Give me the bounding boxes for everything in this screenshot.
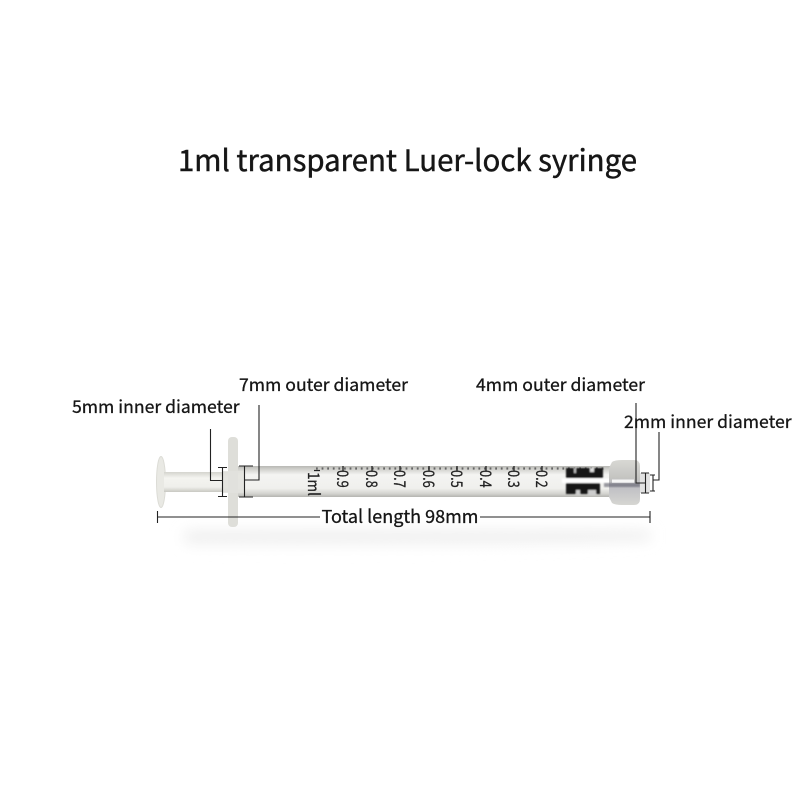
label: 7mm outer diameter: 7mm outer diameter — [239, 372, 408, 397]
graduation labels: 0.4 — [474, 470, 498, 488]
luer tip — [640, 473, 650, 493]
graduation labels: 0.6 — [417, 470, 441, 488]
hub highlight — [612, 480, 634, 483]
label: total length: Total length 98mm — [322, 503, 478, 529]
label: 7mm outer diameter — [239, 372, 408, 497]
graduation labels: 0.3 — [502, 470, 526, 488]
flange collar — [222, 471, 244, 493]
graduation labels: 0.5 — [445, 470, 469, 488]
graduation labels: 1ml — [303, 472, 325, 496]
label: 5mm inner diameter — [72, 394, 240, 496]
graduation ticks — [314, 466, 604, 471]
label: 2mm inner diameter: 2mm inner diameter — [624, 409, 792, 434]
title: 1ml transparent Luer-lock syringe — [178, 138, 637, 180]
ground shadow — [185, 532, 650, 547]
label: 5mm inner diameter: 5mm inner diameter — [72, 394, 240, 419]
flange — [228, 437, 238, 527]
black plunger seal — [562, 468, 612, 495]
label: 4mm outer diameter — [476, 372, 649, 493]
plunger rod — [164, 472, 228, 492]
graduation labels — [303, 470, 554, 496]
label: total length — [158, 503, 650, 529]
graduation labels: 0.9 — [331, 470, 355, 488]
label: 4mm outer diameter: 4mm outer diameter — [476, 372, 645, 397]
graduation labels: 0.7 — [388, 470, 412, 488]
luer lock hub — [609, 460, 640, 505]
barrel — [238, 466, 610, 497]
graduation labels: 0.2 — [530, 470, 554, 488]
label: 2mm inner diameter — [624, 409, 792, 491]
syringe — [156, 437, 650, 527]
graduation labels: 0.8 — [360, 470, 384, 488]
plunger disk — [156, 456, 166, 508]
